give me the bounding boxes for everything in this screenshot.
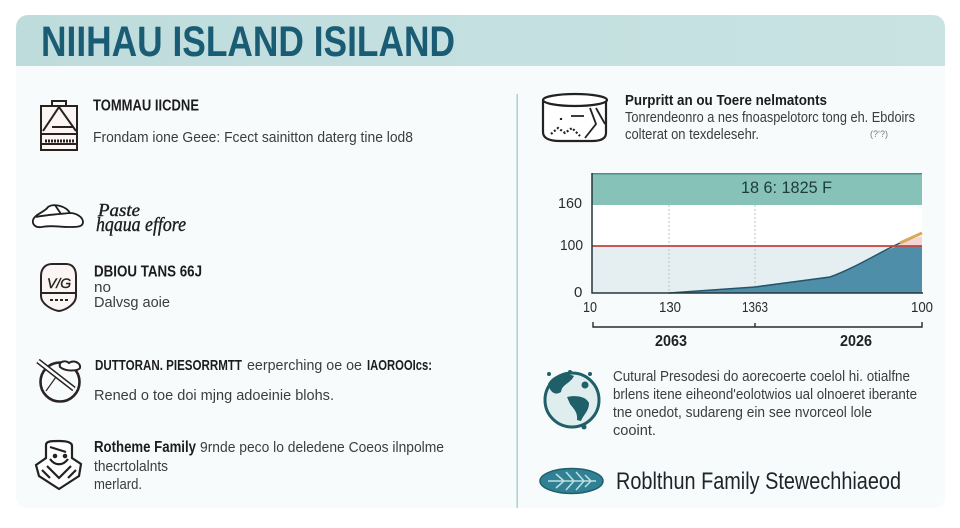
panel: left item 5: thecrtolalnts — [94, 458, 168, 475]
threshold line — [592, 245, 922, 247]
panel: left item 4: IAOROOIcs: — [367, 357, 432, 374]
text: script label: hqaua effore — [96, 214, 186, 236]
icon: shield badge: V/G — [47, 275, 71, 291]
text: cultural description: tne onedot, sudareng ein see nvorceol lole — [613, 404, 872, 421]
panel: population heading block — [543, 92, 915, 143]
y axis labels: 0 — [574, 284, 582, 301]
text: script label: Paste — [97, 200, 140, 220]
text: cultural description: Cutural Presodesi do aorecoerte coelol hi. otialfne — [613, 368, 910, 385]
icon: house document — [41, 101, 77, 150]
plot background — [592, 205, 922, 246]
panel: population heading block: colterat on texdelesehr. — [625, 126, 759, 143]
text: cultural description: cooint. — [613, 422, 656, 439]
text: item 1: Frondam ione Geee: Fcect sainitton daterg tine lod8 — [93, 129, 413, 146]
text: script label — [96, 200, 186, 236]
panel: population heading block: (?ʻ?) — [870, 129, 888, 139]
x axis labels: 10 — [583, 299, 597, 316]
heading: item 3: DBIOU TANS 66J — [94, 264, 202, 280]
y axis labels: 100 — [560, 237, 583, 254]
text: cultural description — [613, 368, 917, 439]
range labels — [655, 333, 872, 350]
x axis labels: 1363 — [742, 299, 768, 316]
chart banner: 18 6: 1825 F — [741, 178, 832, 197]
x axis labels — [583, 299, 933, 316]
icon: portrait — [36, 441, 81, 489]
icon: shield badge — [41, 264, 76, 311]
text: cultural description: brlens itene eiheond'eolotwios ual olnoeret iberante — [613, 386, 917, 403]
text: item 3 line 1: no — [94, 279, 111, 296]
panel: stewardship — [540, 468, 901, 495]
panel: cultural preservation — [545, 368, 917, 439]
range bracket — [593, 322, 922, 327]
text: item 3 line 2: Dalvsg aoie — [94, 294, 170, 311]
panel: left item 1 — [41, 98, 413, 150]
icon: leaf — [540, 468, 603, 494]
panel: left item 5: merlard. — [94, 476, 142, 493]
heading: item 4: DUTTORAN. PIESORRMTT — [95, 357, 242, 374]
divider between columns — [516, 94, 518, 508]
gridlines — [669, 205, 755, 293]
x axis labels: 130 — [659, 299, 681, 316]
icon: island — [33, 205, 83, 227]
icon: crossed bowl — [38, 361, 80, 402]
title banner — [16, 15, 945, 66]
panel: left item 4: eerperching oe oe — [247, 357, 362, 374]
y axis labels — [558, 195, 583, 301]
icon: globe — [545, 370, 599, 430]
heading: population: Purpritt an ou Toere nelmatonts — [625, 92, 827, 109]
axis — [592, 173, 923, 293]
text: population description: Tonrendeonro a nes fnoaspelotorc tong eh. Ebdoirs — [625, 109, 915, 126]
area series — [669, 236, 922, 293]
text: stewardship label: Roblthun Family Stewechhiaeod — [616, 468, 901, 495]
panel: left item 2 — [33, 200, 186, 236]
panel: left item 4 — [38, 357, 432, 404]
icon: drum container — [543, 94, 607, 141]
range labels: 2026 — [840, 333, 872, 350]
x axis labels: 100 — [911, 299, 933, 316]
y axis labels: 160 — [558, 195, 582, 212]
chart: population area chart — [558, 173, 933, 350]
panel: left item 5: 9rnde peco lo deledene Coeos ilnpolme — [200, 439, 444, 456]
text: item 4: Rened o toe doi mjng adoeinie blohs. — [94, 387, 334, 404]
chart banner — [592, 173, 922, 205]
panel: left item 5 — [36, 439, 444, 493]
text: item 5 lines: Rotheme Family — [94, 439, 196, 456]
title banner: NIIHAU ISLAND ISILAND — [41, 18, 455, 66]
heading: item 1: TOMMAU IICDNE — [93, 98, 199, 114]
range labels: 2063 — [655, 333, 687, 350]
panel: left item 3 — [41, 264, 202, 311]
